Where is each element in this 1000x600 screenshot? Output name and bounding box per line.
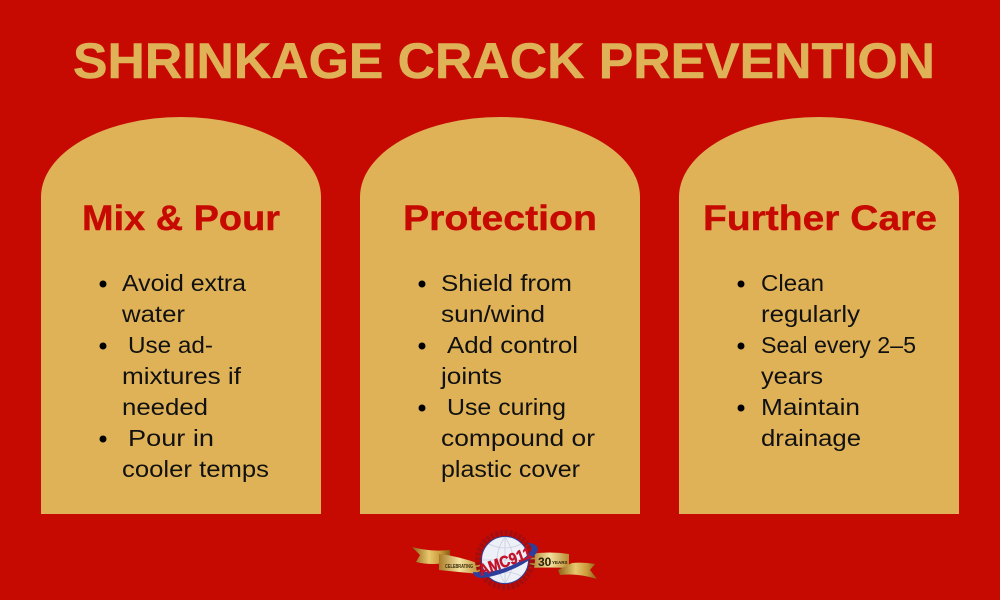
list: Protection: sun/wind [441,301,545,327]
list: Mix & Pour: mixtures if [122,363,242,389]
list: Mix & Pour: needed [122,394,208,420]
list: Mix & Pour: Pour in [128,425,214,451]
list: Mix & Pour: Use ad- [128,332,213,358]
list: Further Care: Seal every 2–5 [761,332,916,358]
list: Protection: Use curing [447,394,566,420]
logo: AMC911 30 years [412,534,597,586]
list: Mix & Pour: cooler temps [122,456,269,482]
list: Protection: Add control [447,332,578,358]
list: Further Care: Clean [761,270,824,296]
list: Further Care: Maintain [761,394,860,420]
right ribbon: YEARS [552,560,568,565]
heading: Protection: Protection [403,199,597,238]
list: Protection: Shield from [441,270,572,296]
orbit swoosh [473,543,538,578]
left ribbon: CELEBRATING [445,564,473,570]
list: Mix & Pour: Avoid extra [122,270,246,296]
heading: Further Care: Further Care [703,199,937,238]
title: SHRINKAGE CRACK PREVENTION [73,33,935,89]
logo wordmark: AMC911 [477,545,534,580]
right ribbon [530,552,597,579]
left ribbon [412,547,480,574]
list: Protection: joints [440,363,502,389]
panel: Protection [360,117,640,514]
list: Protection [418,270,595,482]
seal [478,534,532,586]
list: Further Care [738,270,916,451]
panel: Mix & Pour [41,117,321,514]
list: Further Care: years [761,363,823,389]
list: Protection: compound or [441,425,595,451]
list: Mix & Pour: water [121,301,185,327]
list: Further Care: drainage [761,425,861,451]
right ribbon: 30 [538,555,552,569]
heading: Mix & Pour: Mix & Pour [82,199,280,238]
panel: Further Care [679,117,959,514]
list: Further Care: regularly [761,301,861,327]
list: Mix & Pour [100,270,269,482]
list: Protection: plastic cover [441,456,580,482]
